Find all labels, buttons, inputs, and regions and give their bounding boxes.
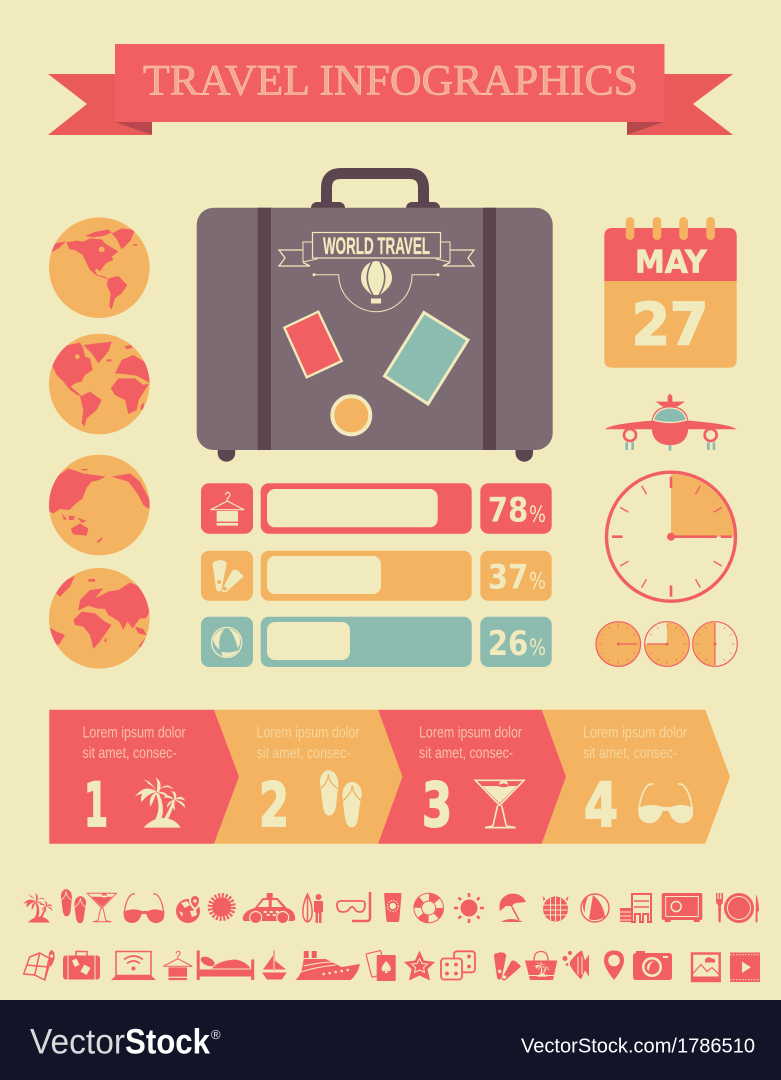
case body <box>197 208 553 450</box>
percent sign: % <box>529 570 546 594</box>
small clock 3 <box>693 622 737 666</box>
icon row 2 <box>24 950 760 982</box>
step 1 text: Lorem ipsum dolor <box>82 724 186 742</box>
icon: sun burst <box>210 896 233 918</box>
icon: laptop wifi <box>111 952 156 980</box>
airplane <box>605 394 737 451</box>
icon: map <box>24 950 55 980</box>
icon: camera <box>633 951 672 980</box>
world travel badge <box>279 232 474 312</box>
step 1 number: 1 <box>84 770 108 841</box>
small clock 1 <box>596 622 641 666</box>
icon: starfish <box>404 950 435 980</box>
icon: flip flops <box>320 770 362 827</box>
straps <box>258 208 496 450</box>
bar 37 percent <box>261 551 472 601</box>
icon: playing cards <box>366 950 396 981</box>
title banner <box>48 44 733 135</box>
step 2 text line 2: sit amet, consec- <box>256 745 350 762</box>
icon row 1 <box>23 889 759 924</box>
footer brand bold: Stock <box>125 1022 210 1062</box>
icon: beach bag <box>525 952 557 980</box>
icon: fork plate knife <box>716 893 759 923</box>
clock hand <box>671 535 717 538</box>
icon: video <box>730 952 760 982</box>
title: TRAVEL INFOGRAPHICS <box>143 58 638 104</box>
icon: sunglasses <box>638 784 693 823</box>
step 2 <box>214 710 402 844</box>
ribbon left tail <box>48 74 152 135</box>
step 3 <box>378 710 566 844</box>
value 78: 78 <box>488 491 528 531</box>
icon: map pin <box>604 950 624 980</box>
icon: fins <box>494 952 521 981</box>
progress row 2 <box>201 551 552 601</box>
icon: sunglasses <box>124 894 164 923</box>
step 1 <box>49 710 239 844</box>
calendar rings <box>626 217 715 240</box>
calendar date panel <box>604 281 737 368</box>
step 3 text: Lorem ipsum dolor <box>419 724 523 742</box>
step 3 text line 2: sit amet, consec- <box>419 745 513 762</box>
value box <box>480 483 552 534</box>
percent sign: % <box>529 636 546 661</box>
globe 3 <box>47 455 151 555</box>
month: MAY <box>635 245 707 281</box>
icon box ball <box>201 617 253 667</box>
date: 27 <box>632 290 708 358</box>
icon: beach ball <box>581 894 609 922</box>
sticker round <box>332 396 370 434</box>
icon: surfer <box>303 894 323 923</box>
icon: safe <box>662 893 702 922</box>
icon: fish <box>562 950 589 980</box>
globe 2 <box>49 334 151 434</box>
value box <box>480 617 552 667</box>
progress row 3 <box>201 617 552 667</box>
step 4 text line 2: sit amet, consec- <box>583 745 677 762</box>
icon: hanger towel <box>163 951 192 980</box>
footer brand light: Vector <box>30 1022 125 1062</box>
icon box fins <box>201 551 253 601</box>
handle <box>326 174 424 205</box>
icon: taxi <box>243 893 295 924</box>
sticker teal <box>384 312 468 404</box>
icon: dice <box>441 951 475 980</box>
footer image id: VectorStock.com/1786510 <box>521 1035 755 1058</box>
icon: cruise ship <box>296 951 360 980</box>
icon: beach umbrella <box>499 894 526 922</box>
globe 1 <box>49 217 150 318</box>
icon: sun <box>454 893 484 923</box>
balloon <box>361 261 392 304</box>
percent sign: % <box>529 503 546 528</box>
icon: palm island <box>135 777 185 828</box>
badge title: WORLD TRAVEL <box>323 233 430 260</box>
ticks <box>612 477 732 597</box>
large clock <box>606 472 736 601</box>
icon: martini <box>475 780 524 828</box>
icon: flip flops <box>61 889 86 923</box>
step 1 text line 2: sit amet, consec- <box>82 745 176 762</box>
icon: snorkel mask <box>337 892 370 921</box>
step 4 number: 4 <box>584 770 618 841</box>
icon: globe pin <box>176 894 201 923</box>
calendar month panel <box>604 228 737 281</box>
value box <box>480 551 552 601</box>
icon: sunscreen <box>384 893 401 922</box>
step 4 text: Lorem ipsum dolor <box>583 724 688 742</box>
icon: disco ball <box>542 894 568 922</box>
calendar <box>604 217 737 368</box>
step 2 text: Lorem ipsum dolor <box>256 724 360 742</box>
icon: martini <box>87 893 116 922</box>
bar 78 percent <box>261 483 472 534</box>
icon: sailboat <box>262 950 287 980</box>
footer bar <box>0 1000 781 1080</box>
sticker red <box>284 312 342 377</box>
icon: bed <box>197 950 254 980</box>
progress row 1 <box>201 483 552 534</box>
quarter sector <box>671 474 734 537</box>
icon: suitcase <box>63 952 100 980</box>
step 2 number: 2 <box>259 770 289 841</box>
icon: building <box>620 894 651 922</box>
icon: palm <box>23 893 52 922</box>
small clock 2 <box>645 622 689 666</box>
icon box hanger <box>201 483 253 534</box>
suitcase <box>197 174 553 462</box>
bar 26 percent <box>261 617 472 667</box>
icon: lifebuoy <box>414 893 444 923</box>
ribbon right tail <box>627 74 733 135</box>
step 3 number: 3 <box>422 770 452 841</box>
registered mark: ® <box>211 1027 221 1042</box>
globe 4 <box>48 568 151 669</box>
step 4 <box>542 710 730 844</box>
icon: photo <box>691 954 721 982</box>
value 26: 26 <box>488 624 528 664</box>
value 37: 37 <box>488 558 528 598</box>
